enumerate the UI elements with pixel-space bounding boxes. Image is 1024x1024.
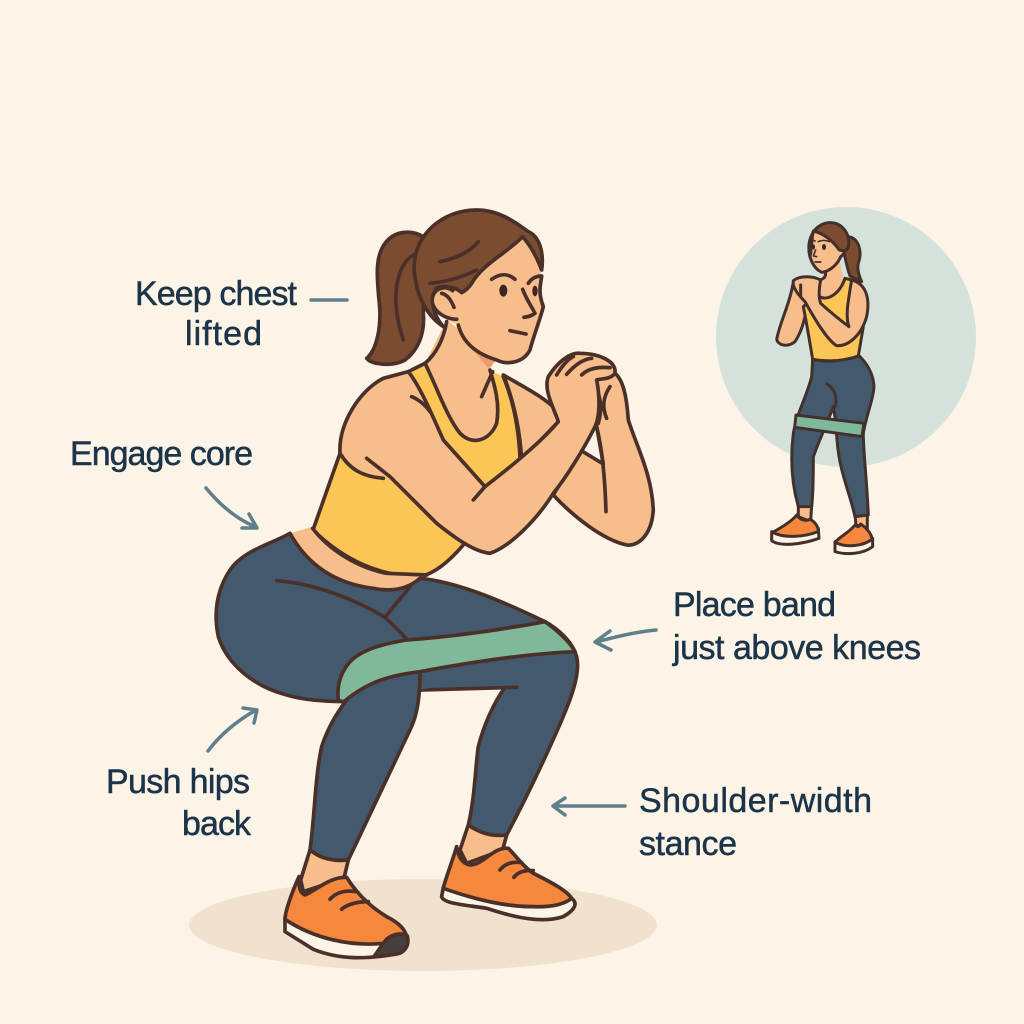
label: push hips back: back — [182, 805, 252, 843]
inset: front view of squat — [772, 223, 874, 554]
far shoulder — [503, 375, 560, 460]
near arm and hands — [340, 353, 615, 553]
label: engage core: Engage core — [70, 435, 253, 473]
label: place band: just above knees — [672, 629, 921, 667]
arrow: place band — [595, 630, 656, 650]
label: shoulder-width stance: Shoulder-width — [639, 782, 872, 820]
ground shadow — [189, 879, 657, 971]
label: push hips back: Push hips — [106, 763, 250, 801]
crop top — [313, 363, 553, 577]
ponytail — [367, 232, 424, 364]
label: keep chest lifted: Keep chest — [135, 275, 298, 313]
near shoe — [285, 850, 408, 958]
ear — [432, 288, 464, 319]
label: keep chest lifted — [135, 275, 298, 353]
hips and thigh — [216, 527, 577, 958]
hair — [414, 210, 542, 327]
neck — [425, 320, 498, 440]
upper body — [313, 210, 653, 577]
arrow: push hips back — [208, 708, 257, 751]
arrow: shoulder-width stance — [553, 798, 625, 815]
label: push hips back — [106, 763, 252, 843]
inset background circle — [716, 207, 976, 467]
main figure: squat with resistance band — [216, 210, 653, 958]
label: keep chest lifted: lifted — [185, 315, 262, 353]
near lower leg — [310, 672, 420, 860]
resistance band — [338, 622, 575, 702]
far arm — [553, 371, 653, 545]
label: place band — [672, 586, 921, 667]
face — [408, 237, 543, 372]
far lower leg — [420, 657, 578, 835]
label: shoulder-width stance: stance — [639, 825, 737, 863]
label: place band: Place band — [673, 586, 836, 624]
arrow: engage core — [206, 488, 257, 528]
far shoe — [442, 825, 575, 920]
dash: keep chest lifted — [311, 298, 347, 302]
label: shoulder-width stance — [639, 782, 872, 863]
neck shadow — [472, 347, 496, 368]
